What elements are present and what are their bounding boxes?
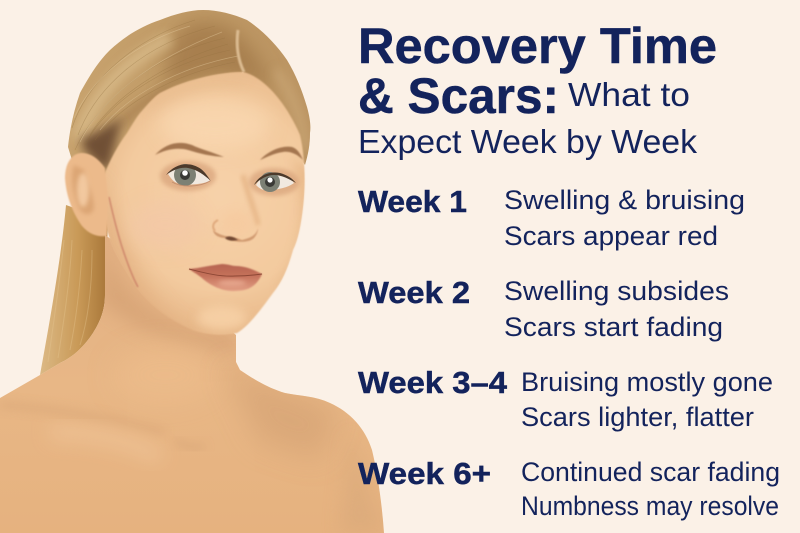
timeline: week 2: Scars start fading xyxy=(504,312,723,342)
timeline: week 2: Swelling subsides xyxy=(504,276,729,306)
title xyxy=(358,18,717,160)
timeline: week 3-4 xyxy=(358,365,773,432)
title: Recovery Time xyxy=(358,18,717,74)
timeline: week 2 xyxy=(358,275,729,342)
title: Expect Week by Week xyxy=(358,123,698,160)
timeline: week 6+ xyxy=(358,456,780,521)
timeline: week 1: Scars appear red xyxy=(504,221,718,251)
timeline: week 6+: Week 6+ xyxy=(358,456,491,491)
timeline: week 3-4: Scars lighter, flatter xyxy=(521,402,754,432)
timeline: week 1: Week 1 xyxy=(358,184,467,219)
shoulders and neck xyxy=(0,235,384,533)
timeline: week 3-4: Week 3–4 xyxy=(358,365,508,400)
illustration: woman's portrait xyxy=(0,10,384,533)
title: What to xyxy=(568,76,690,113)
hair: crown xyxy=(68,10,310,177)
timeline: week 2: Week 2 xyxy=(358,275,470,310)
timeline: week 1 xyxy=(358,184,745,251)
hair: long back section xyxy=(40,205,108,375)
scar along jawline xyxy=(109,197,138,287)
right eye and brow xyxy=(249,147,303,196)
timeline: week 1: Swelling & bruising xyxy=(504,185,745,215)
title: & Scars: xyxy=(358,68,559,124)
nose xyxy=(213,175,258,242)
timeline: week 6+: Numbness may resolve xyxy=(521,491,779,521)
left eye and brow xyxy=(155,143,224,191)
timeline: week 3-4: Bruising mostly gone xyxy=(521,367,773,397)
ear xyxy=(65,153,108,236)
timeline: week 6+: Continued scar fading xyxy=(521,457,780,487)
face xyxy=(105,72,306,335)
lips xyxy=(189,264,262,291)
